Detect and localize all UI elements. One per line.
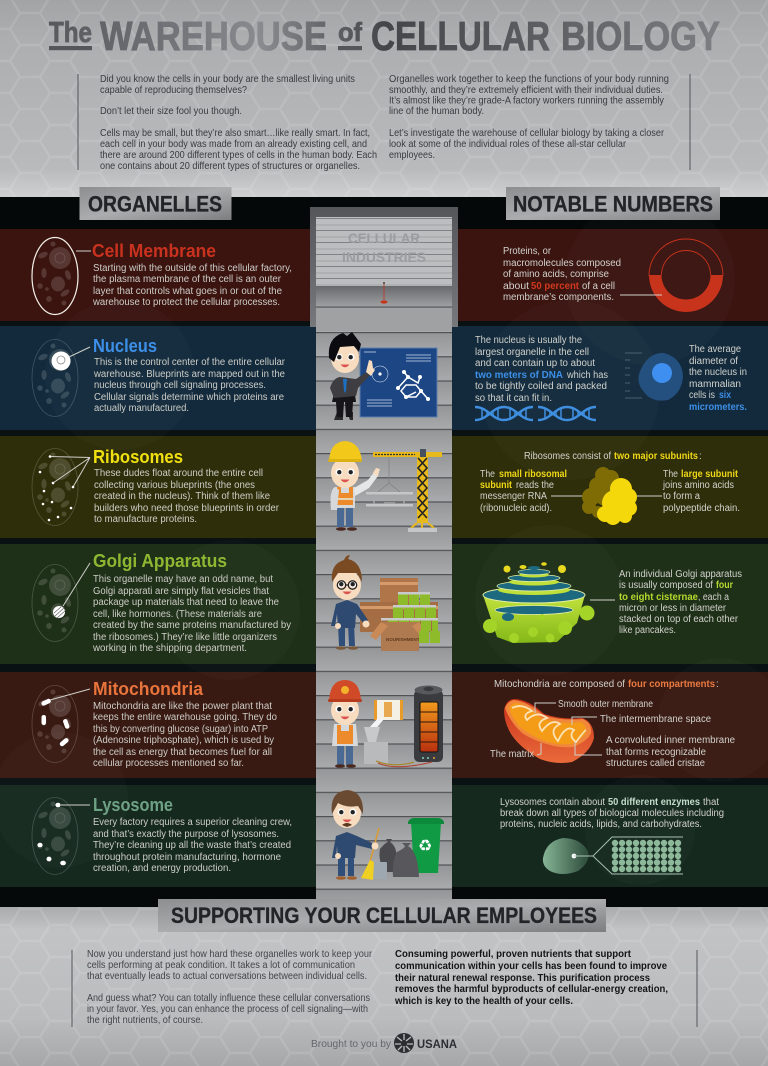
- rolling shutter door: CELLULAR: [348, 231, 420, 246]
- text: mitochondria: [93, 701, 277, 769]
- intro left column: one contains about 20 different types of structures or organelles.: [100, 161, 360, 172]
- blueprint board: [360, 348, 437, 417]
- title: CELLULAR: [371, 13, 550, 59]
- icon: DNA helix: [475, 407, 596, 420]
- numbers: ribosome subunits: Ribosomes consist of: [524, 451, 611, 462]
- intro left column: capable of reproducing themselves?: [100, 85, 247, 96]
- closing text block: [72, 949, 698, 1027]
- numbers: nucleus diameter text: The average: [689, 344, 741, 355]
- closing left column: in your favor. Yes, you can enhance the process of cell signaling—with: [87, 1004, 368, 1015]
- numbers: ribosome subunits: The: [663, 469, 678, 480]
- row backgrounds: [0, 195, 768, 887]
- crane: [366, 449, 442, 532]
- background: bottom hexagon panel: [0, 906, 768, 1066]
- intro left column: Don’t let their size fool you though.: [100, 106, 242, 117]
- intro left column: Cells may be small, but they’re also smart…like really smart. In fact,: [100, 128, 370, 139]
- numbers: nucleus text: so that it can fit in.: [475, 393, 552, 404]
- text: cell membrane: the plasma membrane of the cell is an outer: [93, 274, 282, 285]
- numbers: nucleus diameter text: diameter of: [689, 356, 738, 367]
- numbers: mitochondria text: structures called cristae: [606, 758, 705, 769]
- numbers: mitochondria text: The intermembrane space: [600, 714, 711, 725]
- numbers: nucleus text: which has: [566, 370, 608, 381]
- illustration: builder with crane: [328, 441, 442, 532]
- closing right column: removes the harmful byproducts of cellular-energy creation,: [395, 984, 668, 995]
- numbers: ribosome subunits: messenger RNA: [480, 491, 547, 502]
- text: ribosomes: collecting various blueprints (the ones: [94, 480, 255, 491]
- numbers: ribosome subunits: to form a: [663, 491, 700, 502]
- numbers: lysosome text: that: [703, 797, 719, 808]
- numbers: golgi text: [619, 569, 742, 636]
- closing left column: [87, 949, 372, 1026]
- numbers: ribosome subunits: (ribonucleic acid).: [480, 503, 552, 514]
- text: cell membrane: Starting with the outside of this cellular factory,: [93, 263, 292, 274]
- numbers: ribosome subunits: large subunit: [681, 469, 739, 480]
- closing left column: the right nutrients, of course.: [87, 1015, 203, 1026]
- heading: nucleus: Nucleus: [93, 335, 157, 356]
- illustration: manager with blueprint: [329, 332, 437, 420]
- icon: golgi apparatus: [483, 562, 615, 643]
- icon: mitochondria cell: [32, 686, 90, 762]
- text: mitochondria: (Adenosine triphosphate), which is used by: [93, 735, 274, 746]
- intro right column: line of the human body.: [389, 106, 484, 117]
- intro left column: Did you know the cells in your body are the smallest living units: [100, 74, 355, 85]
- numbers: ribosome subunits: The: [480, 469, 495, 480]
- intro right column: Organelles work together to keep the functions of your body running: [389, 74, 669, 85]
- text: golgi apparatus: Golgi apparati are simply flat vesicles that: [93, 586, 269, 597]
- intro left column: [100, 74, 377, 172]
- numbers: nucleus diameter text: [689, 344, 747, 413]
- numbers: cell membrane text: about: [503, 281, 529, 292]
- closing right column: [394, 949, 668, 1007]
- text: nucleus: Cellular signals determine which proteins are: [94, 392, 284, 403]
- illustration: plant worker with battery: [328, 680, 443, 768]
- text: ribosomes: to manufacture proteins.: [94, 514, 197, 525]
- numbers: lysosome text: break down all types of biological molecules including: [500, 808, 724, 819]
- numbers: lysosome text: 50 different enzymes: [608, 797, 700, 808]
- text: mitochondria: this by converting glucose (sugar) into ATP: [93, 724, 268, 735]
- shipping boxes: NOURISHMENT: [386, 637, 420, 642]
- numbers: nucleus diameter text: micrometers.: [689, 402, 747, 413]
- icon: lysosome cell: [32, 798, 90, 874]
- heading: supporting your cellular employees: SUPPORTING YOUR CELLULAR EMPLOYEES: [171, 903, 597, 928]
- numbers: ribosome subunits: subunit: [480, 480, 513, 491]
- numbers: ribosome subunits: reads the: [516, 480, 554, 491]
- grinder and packet: [364, 700, 432, 767]
- panel: lysosome: [32, 790, 724, 880]
- footer: brought to you by USANA: Brought to you by: [311, 1038, 392, 1050]
- numbers: lysosome text: proteins, nucleic acids, lipids, and carbohydrates.: [500, 819, 702, 830]
- icon: ribosomes cell: [32, 448, 90, 526]
- numbers: cell membrane text: membrane’s components.: [503, 292, 614, 303]
- text: ribosomes: builders who need those blueprints in order: [94, 503, 280, 514]
- text: ribosomes: These dudes float around the entire cell: [94, 468, 263, 479]
- text: mitochondria: Mitochondria are like the power plant that: [93, 701, 272, 712]
- closing left column: cells performing at peak condition. It takes a lot of communication: [87, 960, 355, 971]
- title: WAREHOUSE: [100, 13, 327, 59]
- numbers: nucleus diameter text: six: [719, 390, 731, 401]
- text: lysosome: Every factory requires a superior cleaning crew,: [93, 817, 292, 828]
- numbers: golgi text: like pancakes.: [619, 625, 676, 636]
- text: cell membrane: warehouse to protect the cellular processes.: [92, 297, 280, 308]
- text: nucleus: [93, 357, 286, 414]
- heading: organelles: [80, 187, 232, 220]
- text: lysosome: They’re cleaning up all the waste that’s created: [93, 840, 291, 851]
- intro right column: [389, 74, 669, 161]
- panel: nucleus: [32, 332, 747, 420]
- icon: lysosome enzyme diagram: [543, 837, 683, 874]
- numbers: nucleus diameter text: the nucleus in: [689, 367, 747, 378]
- battery: [414, 686, 443, 762]
- broom and bucket: [361, 828, 387, 880]
- illustration: janitor with recycling bin: [332, 790, 444, 880]
- numbers: mitochondria text: Smooth outer membrane: [558, 699, 653, 710]
- chart: nucleus diameter: [625, 353, 683, 401]
- trash bags: [380, 839, 419, 877]
- text: lysosome: [93, 817, 292, 874]
- text: nucleus: warehouse. Blueprints are mapped out in the: [93, 369, 285, 380]
- icon: mitochondrion diagram: [504, 699, 602, 763]
- numbers: nucleus diameter text: cells is: [689, 390, 715, 401]
- title: BIOLOGY: [561, 13, 720, 59]
- logo: USANA: USANA: [417, 1037, 457, 1051]
- numbers: mitochondria text: A convoluted inner membrane: [606, 735, 735, 746]
- numbers: golgi text: stacked on top of each other: [619, 614, 739, 625]
- intro right column: Let’s investigate the warehouse of cellular biology by taking a closer: [389, 128, 664, 139]
- closing right column: which is key to the health of your cells.: [394, 996, 573, 1007]
- recycling bin: ♻: [418, 838, 432, 855]
- heading: lysosome: Lysosome: [93, 794, 173, 815]
- numbers: golgi text: is usually composed of: [619, 580, 713, 591]
- numbers: cell membrane text: of amino acids, comprise: [503, 269, 609, 280]
- text: ribosomes: created in the nucleus). Think of them like: [94, 491, 270, 502]
- text: golgi apparatus: cell, like hormones. (These materials are: [93, 609, 262, 620]
- numbers: nucleus text: to be tightly coiled and packed: [475, 381, 607, 392]
- title: of: [338, 17, 362, 47]
- numbers: nucleus text: largest organelle in the cell: [475, 347, 589, 358]
- intro right column: smoothly, and they’re extremely efficient with their individual duties.: [389, 85, 663, 96]
- intro right column: employees.: [389, 150, 435, 161]
- closing right column: communication within your cells has been found to improve: [395, 961, 667, 972]
- text: nucleus: This is the control center of the entire cellular: [94, 357, 286, 368]
- icon: ribosome subunits: [551, 467, 662, 525]
- numbers: ribosome subunits: joins amino acids: [662, 480, 734, 491]
- numbers: mitochondria text: :: [716, 679, 719, 690]
- numbers: nucleus text: and can contain up to about: [475, 358, 595, 369]
- numbers: golgi text: to eight cisternae: [619, 592, 698, 603]
- rolling shutter door: INDUSTRIES: [342, 250, 426, 265]
- numbers: golgi text: , each a: [698, 592, 729, 603]
- text: golgi apparatus: [92, 574, 291, 654]
- text: nucleus: actually manufactured.: [94, 403, 189, 414]
- text: cell membrane: layer that controls what goes in or out of the: [93, 286, 282, 297]
- text: mitochondria: cellular processes mentioned so far.: [93, 758, 244, 769]
- intro left column: there are around 200 different types of cells in the human body. Each: [100, 150, 377, 161]
- logo: USANA: [394, 1033, 457, 1053]
- numbers: cell membrane text: of a cell: [582, 281, 615, 292]
- numbers: cell membrane text: 50 percent: [531, 281, 580, 292]
- numbers: ribosome subunits: :: [699, 451, 702, 462]
- text: golgi apparatus: the ribosomes.) They’re like little organizers: [93, 632, 277, 643]
- text: nucleus: nucleus through cell signaling processes.: [94, 380, 266, 391]
- title: [49, 13, 720, 59]
- numbers: mitochondria text: that forms recognizable: [606, 747, 706, 758]
- numbers: mitochondria text: four compartments: [628, 679, 715, 690]
- numbers: golgi text: micron or less in diameter: [619, 603, 727, 614]
- numbers: lysosome text: Lysosomes contain about: [500, 797, 605, 808]
- closing left column: Now you understand just how hard these organelles work to keep your: [87, 949, 372, 960]
- text: golgi apparatus: working in the shipping department.: [92, 643, 247, 654]
- text: golgi apparatus: This organelle may have an odd name, but: [93, 574, 273, 585]
- numbers: golgi text: four: [716, 580, 733, 591]
- numbers: nucleus text: [475, 335, 608, 404]
- text: lysosome: throughout protein manufacturing, hormone: [93, 852, 281, 863]
- cans: [388, 592, 440, 643]
- icon: golgi cell: [32, 563, 90, 642]
- closing left column: And guess what? You can totally influence these cellular conversations: [87, 993, 370, 1004]
- chart: 50 percent ring: [620, 239, 723, 312]
- icon: nucleus cell: [32, 340, 90, 416]
- numbers: ribosome subunits: [480, 451, 740, 514]
- intro right column: look at some of the individual roles of these all-star cellular: [389, 139, 626, 150]
- numbers: cell membrane text: [503, 246, 621, 303]
- text: ribosomes: [94, 468, 280, 525]
- numbers: mitochondria text: The matrix: [490, 749, 534, 760]
- illustration: shipping clerk with boxes: [331, 555, 440, 651]
- numbers: golgi text: An individual Golgi apparatus: [619, 569, 742, 580]
- text: golgi apparatus: package up materials that need to leave the: [93, 597, 279, 608]
- numbers: cell membrane text: macromolecules composed: [503, 258, 621, 269]
- closing right column: Consuming powerful, proven nutrients that support: [395, 949, 631, 960]
- heading: notable numbers: [506, 187, 720, 220]
- panel: ribosomes: [32, 441, 740, 532]
- numbers: ribosome subunits: small ribosomal: [499, 469, 567, 480]
- heading: supporting your cellular employees: [158, 899, 606, 932]
- warehouse column: [310, 207, 458, 907]
- intro left column: each cell in your body was made from an already existing cell, and: [100, 139, 367, 150]
- numbers: nucleus diameter text: mammalian: [689, 379, 741, 390]
- heading: mitochondria: Mitochondria: [93, 678, 204, 699]
- intro text block: [78, 74, 690, 172]
- title: The: [49, 17, 92, 49]
- numbers: nucleus text: two meters of DNA: [475, 370, 563, 381]
- panel: golgi apparatus: [32, 550, 742, 654]
- footer: brought to you by USANA: [311, 1033, 457, 1053]
- text: golgi apparatus: created by the same proteins manufactured by: [93, 620, 291, 631]
- text: mitochondria: the cell as energy that becomes fuel for all: [93, 747, 272, 758]
- heading: ribosomes: Ribosomes: [93, 446, 183, 467]
- numbers: cell membrane text: Proteins, or: [503, 246, 552, 257]
- text: lysosome: and that’s exactly the purpose of lysosomes.: [93, 829, 279, 840]
- intro right column: It’s almost like they’re grade-A factory workers running the assembly: [389, 96, 665, 106]
- closing left column: that eventually leads to actual conversations between individual cells.: [87, 971, 367, 982]
- text: cell membrane: [92, 263, 292, 308]
- background: top hexagon panel: [0, 0, 768, 198]
- closing right column: their natural renewal response. This purification process: [395, 973, 650, 984]
- numbers: lysosome text: [500, 797, 724, 830]
- text: lysosome: creation, and energy production.: [93, 863, 231, 874]
- numbers: ribosome subunits: two major subunits: [614, 451, 698, 462]
- panel: cell membrane: [32, 238, 723, 314]
- icon: cell membrane: [32, 238, 91, 314]
- numbers: mitochondria text: Mitochondria are composed of: [494, 679, 625, 690]
- heading: notable numbers: NOTABLE NUMBERS: [513, 192, 713, 216]
- rolling shutter door: [316, 217, 452, 331]
- text: mitochondria: keeps the entire warehouse going. They do: [93, 712, 277, 723]
- heading: golgi apparatus: Golgi Apparatus: [93, 550, 227, 571]
- numbers: nucleus text: The nucleus is usually the: [475, 335, 582, 346]
- numbers: ribosome subunits: polypeptide chain.: [663, 503, 740, 514]
- heading: organelles: ORGANELLES: [88, 192, 222, 216]
- dark central band: [0, 197, 768, 907]
- heading: cell membrane: Cell Membrane: [92, 240, 216, 261]
- numbers: mitochondria text: [490, 679, 735, 769]
- panel: mitochondria: [32, 678, 735, 769]
